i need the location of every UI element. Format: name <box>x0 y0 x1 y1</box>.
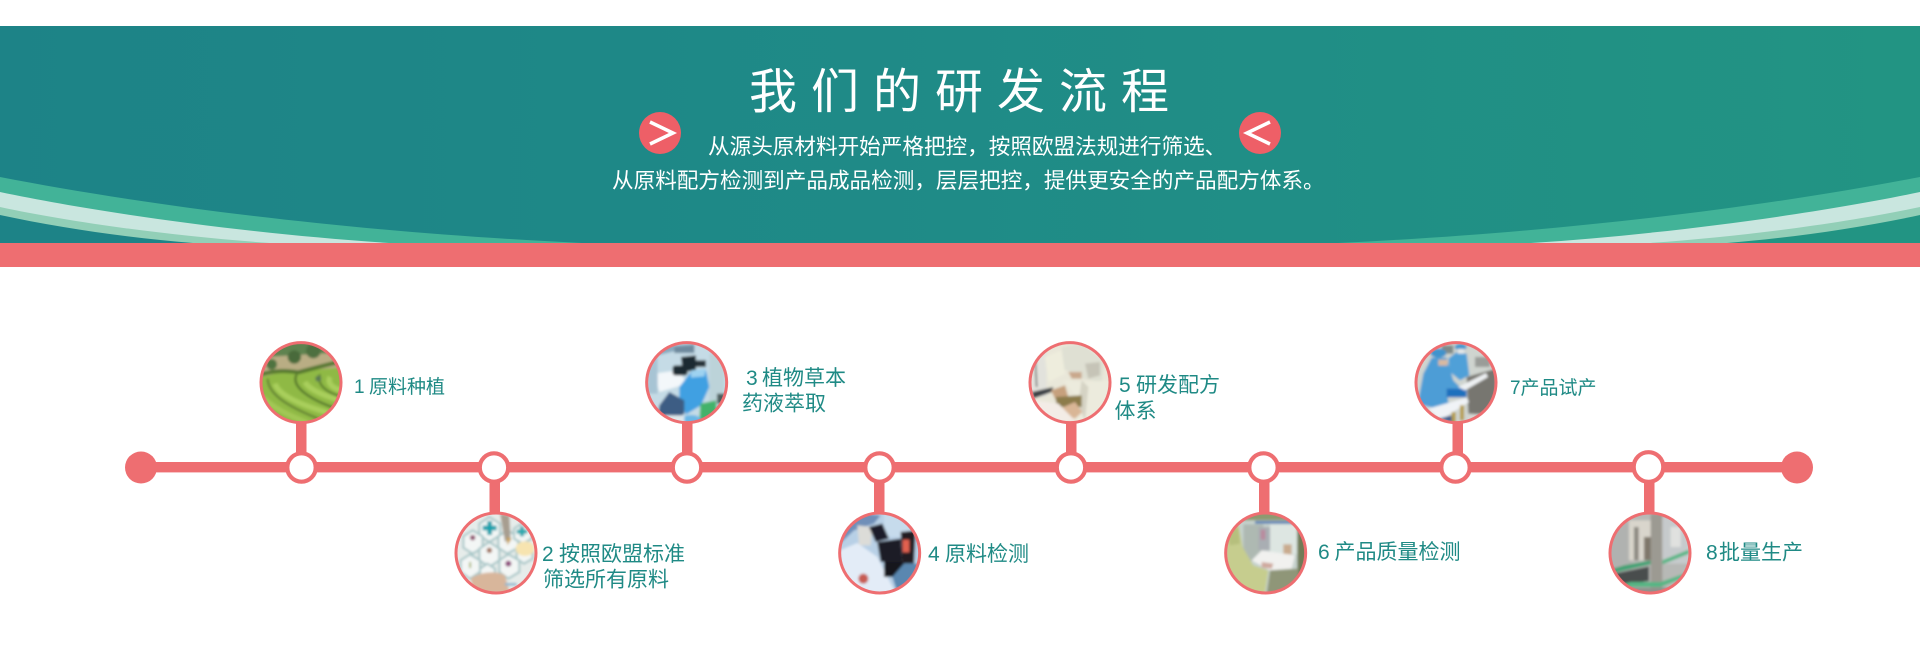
label: 产品质量检测 <box>1334 541 1460 564</box>
label: 筛选所有原料 <box>543 568 669 592</box>
label: 1 <box>354 377 365 398</box>
photo: filling line machine <box>1608 512 1692 594</box>
subtitle <box>612 134 1325 193</box>
label: 3 <box>746 367 758 390</box>
step 1: raw material planting <box>255 337 445 482</box>
label <box>742 367 846 416</box>
step 6: product quality testing <box>1220 453 1460 599</box>
label: 植物草本 <box>762 367 846 390</box>
label: 8 <box>1706 542 1718 564</box>
photo: scientist at microscope <box>838 512 922 594</box>
title: 我们的研发流程 <box>749 66 1183 119</box>
label: 研发配方 <box>1136 374 1220 397</box>
label: 体系 <box>1114 400 1156 423</box>
photo: workers in blue gowns <box>1414 341 1498 424</box>
subtitle: 从源头原材料开始严格把控，按照欧盟法规进行筛选、 <box>708 134 1226 159</box>
photo: blue glove and microscope <box>645 341 728 424</box>
icon: left chevron badge <box>1239 112 1281 154</box>
label: 批量生产 <box>1719 542 1803 564</box>
subtitle: 从原料配方检测到产品成品检测，层层把控，提供更安全的产品配方体系。 <box>612 168 1325 193</box>
timeline axis <box>125 452 1813 484</box>
label <box>1114 374 1220 423</box>
label: 7 <box>1510 378 1521 399</box>
step 2: EU standard screening <box>450 453 685 599</box>
label: 4 <box>928 543 940 566</box>
step 4: raw material testing <box>834 453 1029 599</box>
photo: hexagon interface <box>454 512 538 594</box>
label <box>542 543 685 592</box>
step 5: formulation system <box>1025 337 1220 482</box>
label: 6 <box>1318 541 1330 564</box>
label: 原料种植 <box>369 376 445 398</box>
icon: right chevron badge <box>639 112 681 154</box>
photo: tea field <box>260 341 342 424</box>
label: 原料检测 <box>945 543 1029 566</box>
step 7: product trial <box>1410 337 1597 482</box>
photo: clean-room worker <box>1224 512 1308 594</box>
label: 5 <box>1119 374 1131 397</box>
panel: header banner <box>0 26 1920 267</box>
label: 2 <box>542 543 554 566</box>
decorative swoosh right <box>1338 177 1920 243</box>
decorative swoosh left <box>0 177 582 243</box>
label: 药液萃取 <box>742 392 826 416</box>
step 3: herbal extraction <box>641 337 846 482</box>
step 8: batch production <box>1604 452 1803 599</box>
photo: lab researcher <box>1028 341 1112 424</box>
label: 按照欧盟标准 <box>559 543 685 566</box>
label: 产品试产 <box>1520 377 1597 399</box>
coral band <box>0 243 1920 267</box>
